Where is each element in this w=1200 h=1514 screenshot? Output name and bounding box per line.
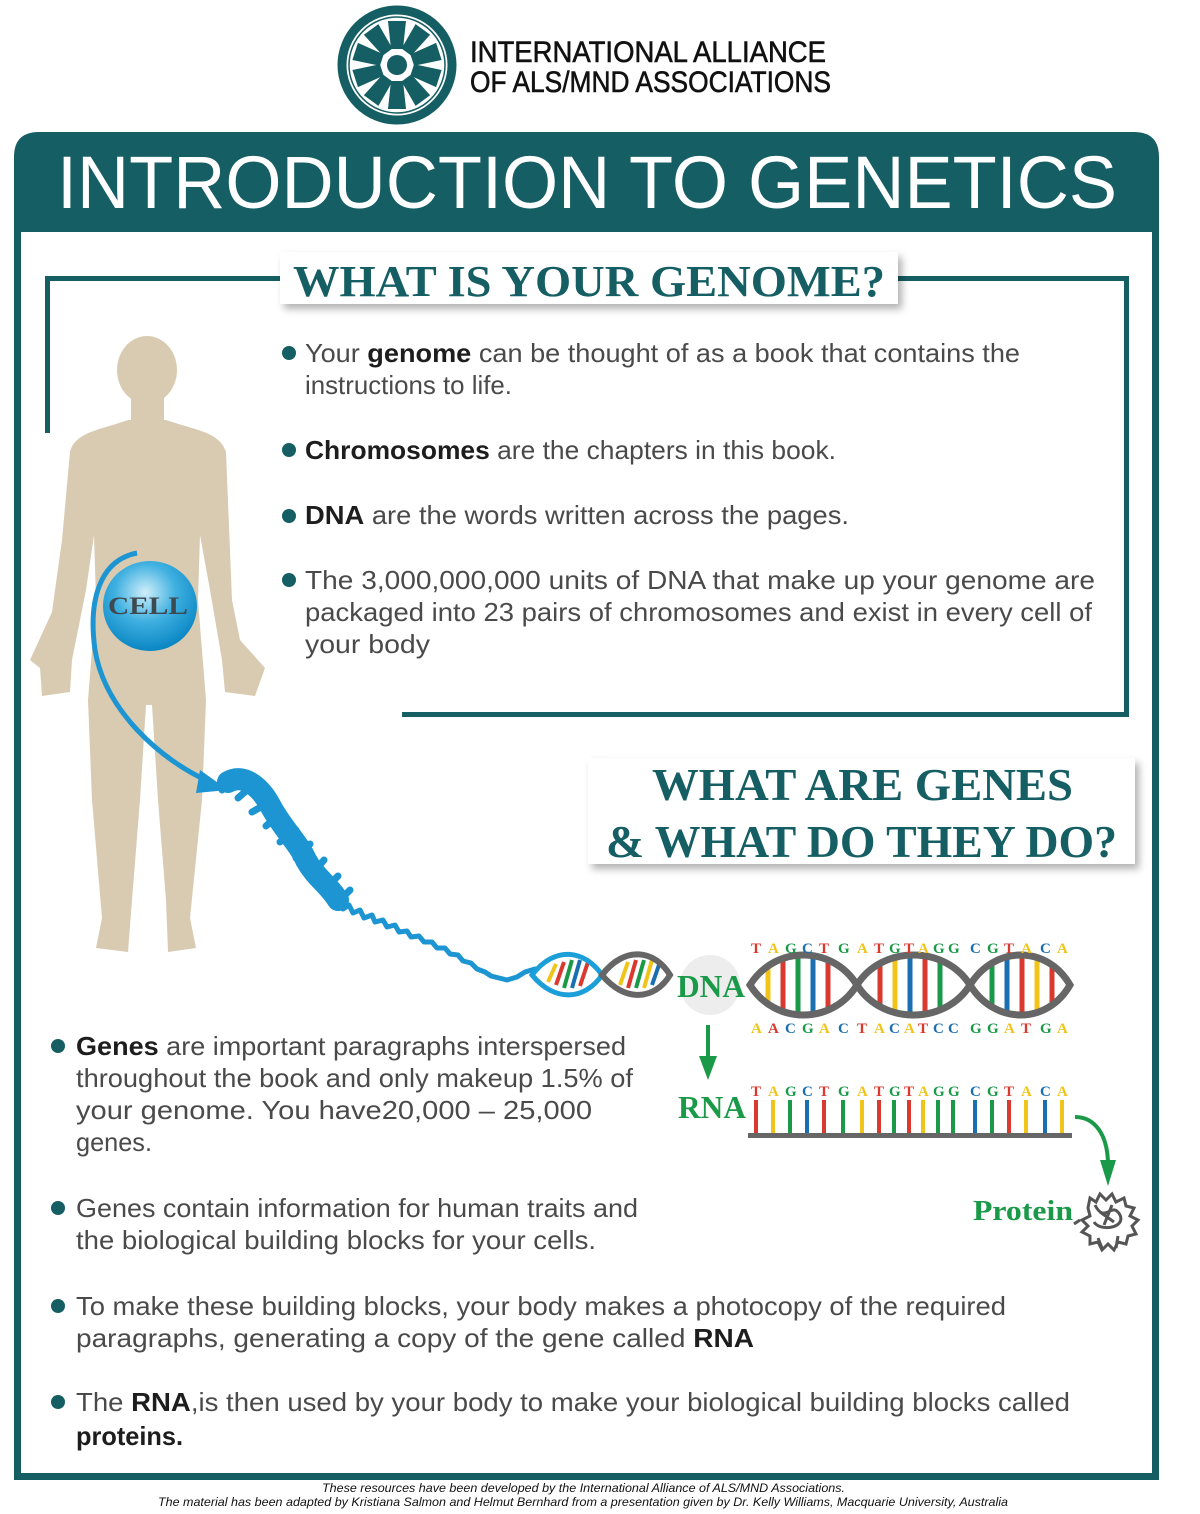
diagram: RNA strand: A <box>918 1084 929 1100</box>
sequence bottom: A <box>751 1021 762 1037</box>
text block: genome bullets: instructions to life. <box>305 370 512 400</box>
sequence bottom: T <box>1021 1021 1031 1037</box>
text block: genome bullets: Your genome can be thought of as a book that contains the <box>305 338 1020 368</box>
diagram: RNA strand <box>678 1084 1072 1138</box>
diagram: RNA strand: RNA <box>678 1089 746 1125</box>
base pairs <box>768 956 1052 1014</box>
diagram: RNA strand: A <box>1057 1084 1068 1100</box>
sequence bottom: G <box>987 1021 999 1037</box>
sequence top: A <box>768 941 779 957</box>
sequence bottom: C <box>838 1021 849 1037</box>
sequence top: G <box>987 941 999 957</box>
panel: genome box lines <box>45 276 1129 717</box>
diagram: RNA strand: G <box>933 1084 945 1100</box>
logo text: OF ALS/MND ASSOCIATIONS <box>470 66 831 99</box>
diagram: RNA strand: A <box>857 1084 868 1100</box>
sequence bottom: C <box>948 1021 959 1037</box>
sequence top: A <box>857 941 868 957</box>
diagram: RNA strand: G <box>785 1084 797 1100</box>
logo <box>342 10 831 120</box>
text block: genome bullets: Chromosomes are the chapters in this book. <box>305 435 836 465</box>
icon: protein blob <box>1074 1194 1138 1250</box>
sequence bottom: C <box>933 1021 944 1037</box>
diagram: RNA strand: A <box>768 1084 779 1100</box>
text block: genes bullets: the biological building blocks for your cells. <box>76 1225 596 1255</box>
sequence top: C <box>802 941 813 957</box>
text block: genes bullets: Genes contain information for human traits and <box>76 1193 638 1223</box>
icon: small dna helices <box>532 954 670 995</box>
text block: genes bullets: paragraphs, generating a copy of the gene called RNA <box>76 1323 754 1353</box>
sequence bottom: G <box>970 1021 982 1037</box>
diagram: RNA strand: T <box>904 1084 914 1100</box>
label: DNA <box>677 955 745 1015</box>
sequence top: C <box>1040 941 1051 957</box>
icon: cell <box>103 561 197 651</box>
diagram: RNA strand: G <box>838 1084 850 1100</box>
diagram: RNA strand: T <box>874 1084 884 1100</box>
sequence bottom: A <box>1004 1021 1015 1037</box>
arrow: DNA to RNA <box>699 1025 717 1080</box>
text block: genes bullets: your genome. You have20,000 – 25,000 <box>76 1095 592 1125</box>
diagram: RNA strand: T <box>1004 1084 1014 1100</box>
icon: chromatin strand <box>222 774 535 980</box>
sequence top: C <box>970 941 981 957</box>
diagram: RNA strand: G <box>987 1084 999 1100</box>
footer credits: These resources have been developed by the International Alliance of ALS/MND Associations. <box>322 1481 845 1495</box>
diagram: RNA strand: C <box>1040 1084 1051 1100</box>
sequence top: G <box>948 941 960 957</box>
icon: human silhouette <box>30 336 265 952</box>
sequence top: T <box>1004 941 1014 957</box>
icon: cell: CELL <box>108 593 188 620</box>
sequence top: G <box>933 941 945 957</box>
sequence bottom: C <box>889 1021 900 1037</box>
text block: genes bullets <box>51 1031 1070 1451</box>
footer credits <box>158 1481 1008 1509</box>
text block: genes bullets: genes. <box>76 1127 152 1157</box>
sequence top: G <box>889 941 901 957</box>
sequence bottom: G <box>802 1021 814 1037</box>
logo text: INTERNATIONAL ALLIANCE <box>470 36 826 69</box>
sequence bottom: A <box>904 1021 915 1037</box>
icon: alliance emblem <box>342 10 452 120</box>
text block: genome bullets: your body <box>305 629 430 659</box>
text block: genes bullets: proteins. <box>76 1421 183 1451</box>
diagram: RNA strand: C <box>802 1084 813 1100</box>
text block: genome bullets: The 3,000,000,000 units of DNA that make up your genome are <box>305 565 1095 595</box>
arrow: RNA to protein <box>1075 1117 1116 1186</box>
sequence top: A <box>1021 941 1032 957</box>
text block: genes bullets: Genes are important paragraphs interspersed <box>76 1031 626 1061</box>
sequence bottom: A <box>819 1021 830 1037</box>
text block: genome bullets: packaged into 23 pairs of chromosomes and exist in every cell of <box>305 597 1093 627</box>
heading: what are genes: WHAT ARE GENES <box>652 759 1073 810</box>
sequence bottom: C <box>785 1021 796 1037</box>
sequence bottom: A <box>768 1021 779 1037</box>
sequence top: G <box>785 941 797 957</box>
heading: what are genes: & WHAT DO THEY DO? <box>606 816 1117 867</box>
sequence top: T <box>819 941 829 957</box>
protein: Protein <box>973 1196 1073 1227</box>
protein <box>973 1194 1138 1250</box>
diagram: RNA strand: T <box>819 1084 829 1100</box>
sequence bottom: G <box>1040 1021 1052 1037</box>
diagram: RNA strand: C <box>970 1084 981 1100</box>
sequence bottom: A <box>1057 1021 1068 1037</box>
text block: genes bullets: throughout the book and only makeup 1.5% of <box>76 1063 634 1093</box>
footer credits: The material has been adapted by Kristiana Salmon and Helmut Bernhard from a presentation given by Dr. Kelly Williams, Macquarie University, Australia <box>158 1495 1008 1509</box>
heading: what is your genome: WHAT IS YOUR GENOME? <box>293 257 885 306</box>
diagram: RNA strand: G <box>889 1084 901 1100</box>
sequence top: T <box>904 941 914 957</box>
logo text <box>470 36 831 99</box>
sequence top: G <box>838 941 850 957</box>
backbone <box>750 955 1070 1015</box>
text block: genes bullets: The RNA,is then used by your body to make your biological building blocks called <box>76 1387 1070 1417</box>
arrow: cell to chromosome <box>93 553 228 793</box>
heading: what are genes <box>588 758 1135 867</box>
diagram: RNA strand: G <box>948 1084 960 1100</box>
title: INTRODUCTION TO GENETICS <box>57 141 1117 224</box>
diagram: DNA double helix <box>677 941 1070 1037</box>
text block: genome bullets <box>282 338 1095 659</box>
sequence bottom: T <box>857 1021 867 1037</box>
diagram: RNA strand: T <box>751 1084 761 1100</box>
text block: genes bullets: To make these building blocks, your body makes a photocopy of the required <box>76 1291 1006 1321</box>
sequence top: T <box>874 941 884 957</box>
diagram: RNA strand: A <box>1021 1084 1032 1100</box>
sequence top: T <box>751 941 761 957</box>
sequence top: A <box>1057 941 1068 957</box>
sequence bottom: A <box>874 1021 885 1037</box>
sequence bottom: T <box>918 1021 928 1037</box>
label: DNA: DNA <box>677 968 745 1004</box>
sequence top: A <box>918 941 929 957</box>
text block: genome bullets: DNA are the words written across the pages. <box>305 500 849 530</box>
